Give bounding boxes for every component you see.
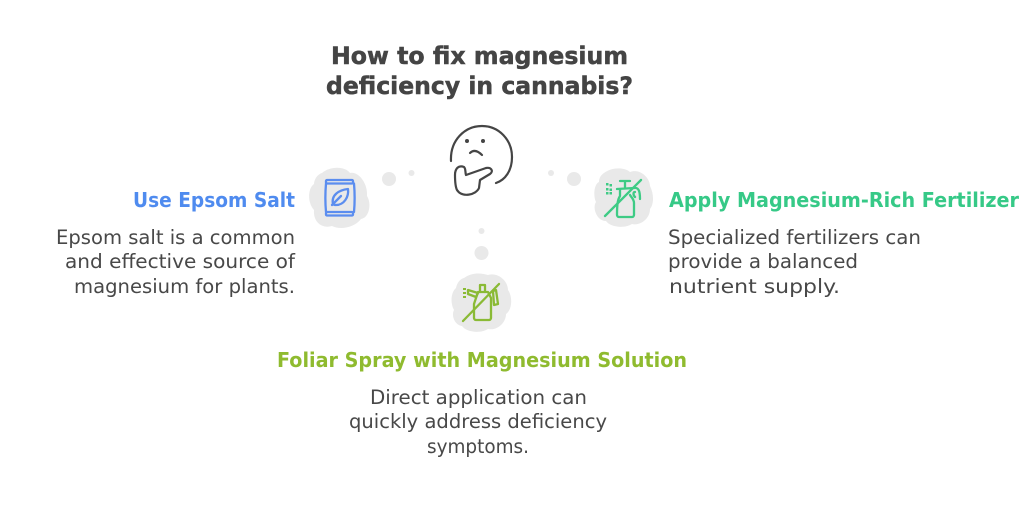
title: deficiency in cannabis? <box>326 72 633 100</box>
icon: thinking face <box>451 126 512 195</box>
text block: Specialized fertilizers can <box>668 226 921 249</box>
text block: Epsom salt is a common <box>56 226 295 249</box>
text block: magnesium for plants. <box>74 275 295 298</box>
text block <box>668 226 921 298</box>
text block <box>56 226 296 298</box>
thought bubbles: left <box>382 170 414 186</box>
text block <box>349 386 607 458</box>
heading: Apply Magnesium-Rich Fertilizer <box>669 188 1019 212</box>
heading: Foliar Spray with Magnesium Solution <box>277 348 687 372</box>
text block: Direct application can <box>370 386 587 409</box>
text block: symptoms. <box>427 435 529 458</box>
panel: foliar spray with magnesium solution <box>277 273 687 458</box>
heading: Use Epsom Salt <box>133 188 295 212</box>
icon: crossed spray bottle <box>594 168 653 227</box>
text block: provide a balanced <box>668 250 858 273</box>
panel: apply magnesium-rich fertilizer <box>594 168 1019 298</box>
thought bubbles: right <box>548 170 581 186</box>
icon: fertilizer bag <box>309 168 369 228</box>
text block: quickly address deficiency <box>349 410 607 433</box>
thought bubbles: bottom <box>474 228 488 260</box>
title <box>326 42 633 100</box>
icon: crossed pump sprayer <box>452 273 511 332</box>
text block: and effective source of <box>65 250 296 273</box>
title: How to fix magnesium <box>331 42 628 70</box>
panel: use epsom salt <box>56 168 369 298</box>
text block: nutrient supply. <box>669 275 840 298</box>
